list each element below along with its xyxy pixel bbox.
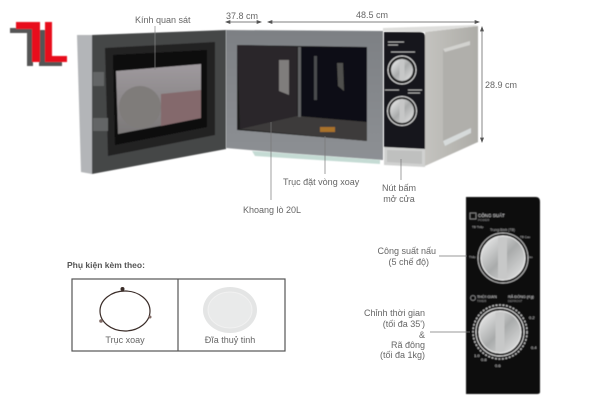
power level labels: Thấp <box>469 255 476 259</box>
label: công suất: POWER <box>478 218 490 222</box>
dimension: 48.5 cm: 48.5 cm <box>356 10 388 20</box>
power level labels: Cao <box>527 255 533 259</box>
oven cavity <box>237 45 367 141</box>
label: thời gian and rã đông: RÃ ĐÔNG (Kg) <box>508 294 535 299</box>
timer scale labels <box>474 315 537 368</box>
control panel <box>384 32 425 149</box>
icon: rotating ring <box>99 287 152 331</box>
label: Trục đặt vòng xoay <box>283 136 360 187</box>
icon: glass plate <box>203 287 257 333</box>
control panel detail <box>466 197 540 394</box>
side panel <box>425 26 478 166</box>
label: Công suất nấu: (5 chế độ) <box>388 257 429 267</box>
door release button <box>384 147 425 167</box>
label: thời gian and rã đông: DEFROST <box>508 299 523 303</box>
label: Khoang lò 20L: Khoang lò 20L <box>243 205 301 215</box>
label: Kính quan sát: Kính quan sát <box>135 15 191 25</box>
label: thời gian and rã đông: TIMER <box>477 299 487 303</box>
power level labels <box>469 225 533 259</box>
power level labels: Trung Bình (TB) <box>490 228 515 232</box>
door inner frame <box>105 42 215 156</box>
timer scale labels: 0.8 <box>481 357 487 362</box>
label: thời gian and rã đông: THỜI GIAN <box>477 294 497 299</box>
timer scale labels: 0.6 <box>495 363 501 368</box>
label: Chỉnh thời gian và rã đông <box>364 308 470 360</box>
label: Chỉnh thời gian và rã đông: (tối đa 1kg) <box>380 350 425 360</box>
label: Kính quan sát <box>135 15 191 70</box>
label: Chỉnh thời gian và rã đông: (tối đa 35') <box>383 319 425 329</box>
label: Khoang lò 20L <box>243 122 301 215</box>
dimension: 37.8 cm: 37.8 cm <box>226 11 258 21</box>
label: Nút bấm mở cửa: mở cửa <box>383 194 415 204</box>
microwave door <box>77 30 226 174</box>
label: Công suất nấu: Công suất nấu <box>377 246 436 256</box>
heading: Phụ kiện kèm theo: Phụ kiện kèm theo: <box>67 260 145 270</box>
dimension: 48.5 cm <box>268 10 479 24</box>
label: thời gian and rã đông <box>470 294 535 303</box>
power level labels: TB Cao <box>520 235 531 239</box>
door window mesh <box>116 64 201 134</box>
panel: accessories <box>72 279 285 351</box>
door hinges <box>93 72 108 131</box>
label: công suất <box>470 212 505 222</box>
caption: Trục xoay: Trục xoay <box>105 335 145 345</box>
timer scale labels: 1.0 <box>474 353 480 358</box>
label: Chỉnh thời gian và rã đông: Chỉnh thời gian <box>364 308 425 318</box>
label: Nút bấm mở cửa: Nút bấm <box>382 183 416 193</box>
label: Nút bấm mở cửa <box>382 159 416 204</box>
label: Chỉnh thời gian và rã đông: & <box>419 330 425 340</box>
dimension: 28.9 cm <box>480 27 517 142</box>
label: Chỉnh thời gian và rã đông: Rã đông <box>391 340 425 350</box>
label: Trục đặt vòng xoay: Trục đặt vòng xoay <box>283 177 360 187</box>
logo: TL <box>10 22 67 66</box>
timer scale labels: 0.4 <box>531 345 537 350</box>
label: công suất: CÔNG SUẤT <box>478 212 505 218</box>
dimension: 28.9 cm: 28.9 cm <box>485 80 517 90</box>
knob: power <box>478 233 528 283</box>
power level labels: TB Thấp <box>472 225 484 229</box>
microwave body <box>226 25 478 167</box>
caption: Đĩa thuỷ tinh: Đĩa thuỷ tinh <box>205 335 255 345</box>
label: Công suất nấu <box>377 246 467 267</box>
knob: timer <box>473 305 527 359</box>
timer scale labels: 0.2 <box>529 315 535 320</box>
